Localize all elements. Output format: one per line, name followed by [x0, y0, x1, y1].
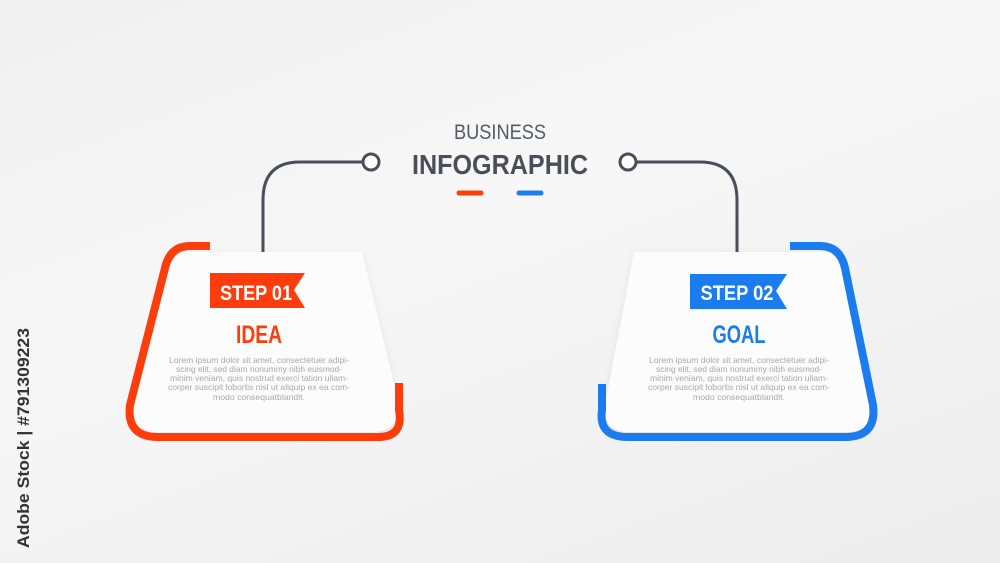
text block: corper suscipit lobortis nisl ut aliquip ex ea com- — [648, 382, 830, 392]
text block — [648, 355, 830, 402]
text block: modo consequatblandit. — [693, 392, 785, 402]
heading: idea: IDEA — [236, 321, 282, 349]
text block: Lorem ipsum dolor sit amet, consectetuer adipi- — [169, 355, 349, 365]
title: INFOGRAPHIC — [412, 149, 588, 180]
connector: right — [620, 154, 737, 252]
tag: step 02: STEP 02 — [700, 282, 774, 305]
text block: modo consequatblandit. — [213, 392, 305, 402]
panel: step 01 idea — [130, 246, 400, 437]
heading: goal: GOAL — [712, 321, 766, 349]
text block: minim veniam, quis nostrud exerci tation ullam- — [170, 373, 348, 383]
tag: step 01: STEP 01 — [220, 282, 292, 305]
tag: step 01 — [210, 273, 305, 308]
title: BUSINESS — [454, 121, 546, 144]
watermark id: Adobe Stock | #791309223 — [14, 328, 33, 548]
panel: step 02 goal — [602, 246, 873, 437]
tag: step 02 — [690, 274, 787, 309]
text block: scing elit, sed diam nonummy nibh euismod- — [176, 364, 342, 374]
text block: corper suscipit lobortis nisl ut aliquip ex ea com- — [168, 382, 350, 392]
title — [412, 121, 588, 180]
text block — [168, 355, 350, 402]
text block: minim veniam, quis nostrud exerci tation ullam- — [650, 373, 828, 383]
title accent dashes — [459, 190, 541, 196]
connector: left — [263, 154, 379, 252]
text block: Lorem ipsum dolor sit amet, consectetuer adipi- — [649, 355, 829, 365]
text block: scing elit, sed diam nonummy nibh euismod- — [656, 364, 822, 374]
